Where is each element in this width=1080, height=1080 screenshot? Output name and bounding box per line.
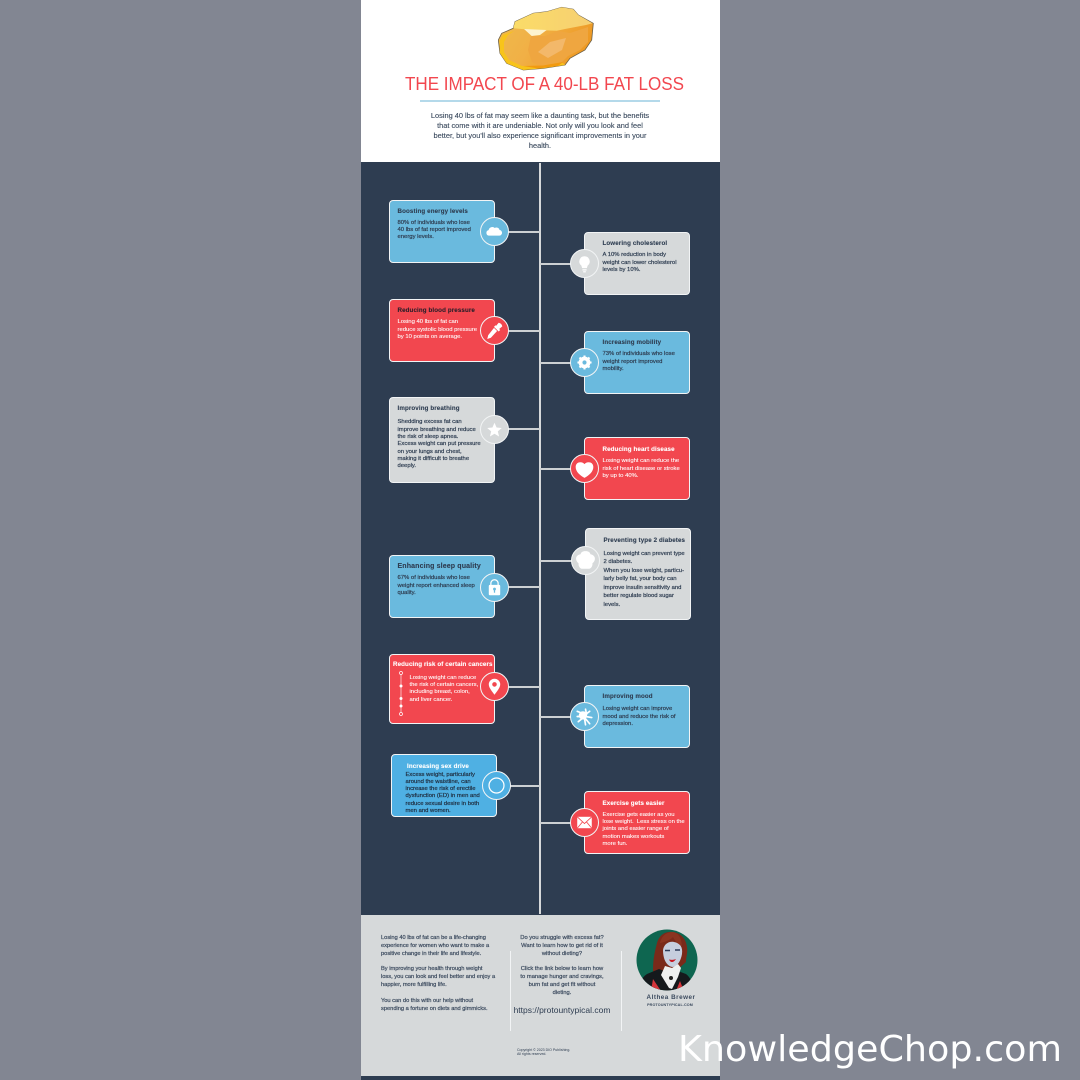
decorative rule (420, 100, 660, 102)
body text: the risk of certain cancers, (410, 682, 478, 688)
icon: map pin (480, 672, 509, 700)
portrait (636, 930, 698, 990)
footer summary text: By improving your health through weight (381, 966, 482, 972)
body text: more fun. (602, 841, 627, 847)
panel: exercise gets easier (584, 791, 690, 854)
body text (602, 252, 676, 273)
body text: by 10 points on average. (398, 334, 462, 340)
panel: lowering cholesterol (584, 232, 690, 295)
body text: levels by 10%. (602, 267, 640, 273)
icon: cloud (480, 216, 509, 246)
icon: rocket splash (570, 702, 598, 730)
body text: energy levels. (398, 234, 434, 240)
body text: making it difficult to breathe (398, 456, 469, 462)
body text: Shedding excess fat can (398, 419, 462, 425)
body text: dysfunction (ED) in men and (406, 793, 480, 799)
heading: Enhancing sleep quality (398, 563, 481, 570)
body text: Losing 40 lbs of fat can (398, 319, 458, 325)
body text: weight report enhanced sleep (398, 583, 475, 589)
heading: Boosting energy levels (398, 208, 468, 215)
body text: motion makes workouts (602, 834, 664, 840)
footer summary text: positive change in their life and lifestyle. (381, 951, 481, 957)
body text: reduce systolic blood pressure (398, 327, 477, 333)
footer summary text: loss, you can look and feel better and enjoy a (381, 974, 495, 980)
body text (602, 706, 676, 727)
author site: PROTOUNTYPICAL.COM (647, 1003, 693, 1007)
body text (410, 675, 478, 703)
body text: better regulate blood sugar (604, 593, 674, 599)
body text: lose weight. Less stress on the (602, 819, 685, 825)
footer summary text: Losing 40 lbs of fat can be a life-changing (381, 935, 486, 941)
body text: deeply. (398, 463, 416, 469)
body text (602, 812, 685, 847)
copyright: All rights reserved. (517, 1052, 546, 1056)
body text: risk of heart disease or stroke (602, 466, 680, 472)
body text: and liver cancer. (410, 697, 452, 703)
body text (398, 220, 471, 240)
body text: on your lungs and chest, (398, 449, 462, 455)
copyright: Copyright © 2023 DIO Publishing. (517, 1048, 570, 1052)
title: THE IMPACT OF A 40-LB FAT LOSS (405, 73, 684, 94)
body text: mobility. (602, 366, 624, 372)
panel: increasing mobility (584, 331, 690, 394)
icon: lump of fat (498, 6, 594, 70)
panel: reducing blood pressure (389, 299, 495, 362)
panel: preventing type 2 diabetes (585, 528, 691, 620)
body text: 73% of individuals who lose (602, 351, 675, 357)
call to action text: Do you struggle with excess fat? (520, 935, 604, 941)
copyright (517, 1048, 570, 1056)
body text: Losing weight can reduce (410, 675, 476, 681)
intro text: health. (529, 141, 551, 150)
icon: heart (570, 454, 598, 482)
body text: including breast, colon, (410, 689, 470, 695)
panel: enhancing sleep quality (389, 555, 495, 618)
body text: by up to 40%. (602, 473, 639, 479)
body text: mood and reduce the risk of (602, 714, 676, 720)
heading: Improving breathing (398, 405, 460, 412)
body text: A 10% reduction in body (602, 252, 666, 258)
footer summary text: You can do this with our help without (381, 998, 473, 1004)
body text: Excess weight, particularly (406, 772, 475, 778)
call to action text: without dieting? (542, 951, 582, 957)
intro text (431, 111, 649, 150)
panel: header (361, 0, 720, 162)
heading: Reducing heart disease (602, 446, 675, 453)
panel: boosting energy levels (389, 200, 495, 263)
heading: Preventing type 2 diabetes (604, 537, 685, 544)
panel: improving mood (584, 685, 690, 748)
intro text: Losing 40 lbs of fat may seem like a daunting task, but the benefits (431, 111, 649, 120)
panel: improving breathing (389, 397, 495, 483)
body text: weight can lower cholesterol (602, 260, 676, 266)
body text (398, 418, 481, 469)
body text (398, 319, 477, 340)
call to action text: Want to learn how to get rid of it (521, 943, 603, 949)
body text: 80% of individuals who lose (398, 220, 470, 226)
icon: star (480, 414, 509, 444)
icon: ring (482, 770, 510, 800)
body text (604, 550, 685, 608)
icon: padlock (480, 572, 509, 602)
call to action text: to manage hunger and cravings, (520, 974, 604, 980)
body text: joints and easier range of (602, 826, 669, 832)
body text: Losing weight can prevent type (604, 551, 685, 557)
body text: improve breathing and reduce (398, 427, 476, 433)
intro text: better, but you'll also experience significant improvements in your (434, 131, 646, 140)
watermark: KnowledgeChop.com (678, 1029, 1062, 1070)
panel: timeline (361, 162, 720, 915)
icon: dropper (480, 316, 509, 345)
icon: flower blob (570, 546, 600, 574)
body text (602, 350, 675, 372)
panel: increasing sex drive (391, 754, 497, 817)
body text: improve insulin sensitivity and (604, 585, 681, 591)
heading: Improving mood (602, 693, 653, 700)
icon: gear (570, 348, 598, 376)
body text: Losing weight can improve (602, 706, 672, 712)
icon: light bulb (570, 248, 598, 278)
body text: reduce sexual desire in both (406, 801, 479, 807)
body text: Losing weight can reduce the (602, 458, 679, 464)
body text: 2 diabetes. (604, 559, 632, 565)
call to action text: burn fat and get fit without (529, 982, 595, 988)
heading: Increasing sex drive (407, 763, 469, 770)
body text: increase the risk of erectile (406, 786, 476, 792)
author name: Althea Brewer (647, 994, 695, 1001)
footer summary text: spending a fortune on diets and gimmicks. (381, 1006, 488, 1012)
link: https://protountypical.com (514, 1005, 610, 1015)
call to action text (520, 934, 604, 996)
call to action text: dieting. (553, 990, 571, 996)
body text: men and women. (406, 808, 451, 814)
heading: Increasing mobility (602, 339, 661, 346)
body text: around the waistline, can (406, 779, 471, 785)
body text: Exercise gets easier as you (602, 812, 675, 818)
body text (406, 772, 480, 814)
body text: 40 lbs of fat report improved (398, 227, 471, 233)
footer summary text: experience for women who want to make a (381, 943, 489, 949)
body text: When you lose weight, particu- (604, 568, 684, 574)
body text: depression. (602, 721, 633, 727)
body text: levels. (604, 602, 620, 608)
panel: reducing heart disease (584, 437, 690, 500)
footer summary text: happier, more fulfilling life. (381, 982, 447, 988)
heading: Reducing risk of certain cancers (393, 661, 493, 668)
intro text: that come with it are undeniable. Not only will you look and feel (437, 121, 643, 130)
heading: Lowering cholesterol (602, 240, 667, 247)
body text: quality. (398, 590, 416, 596)
footer summary text (381, 934, 496, 1012)
body text: Excess weight can put pressure (398, 441, 481, 447)
body text (602, 458, 680, 479)
panel: footer (361, 915, 720, 1076)
body text: larly belly fat, your body can (604, 576, 677, 582)
heading: Exercise gets easier (602, 800, 664, 807)
body text (397, 574, 475, 596)
body text: weight report improved (602, 359, 662, 365)
timeline bullets (399, 671, 403, 716)
body text: 67% of individuals who lose (398, 575, 470, 581)
panel: reducing risk of certain cancers (389, 654, 495, 724)
heading: Reducing blood pressure (398, 307, 475, 314)
call to action text: Click the link below to learn how (521, 966, 603, 972)
icon: envelope (570, 808, 598, 836)
body text: the risk of sleep apnea. (398, 434, 458, 440)
